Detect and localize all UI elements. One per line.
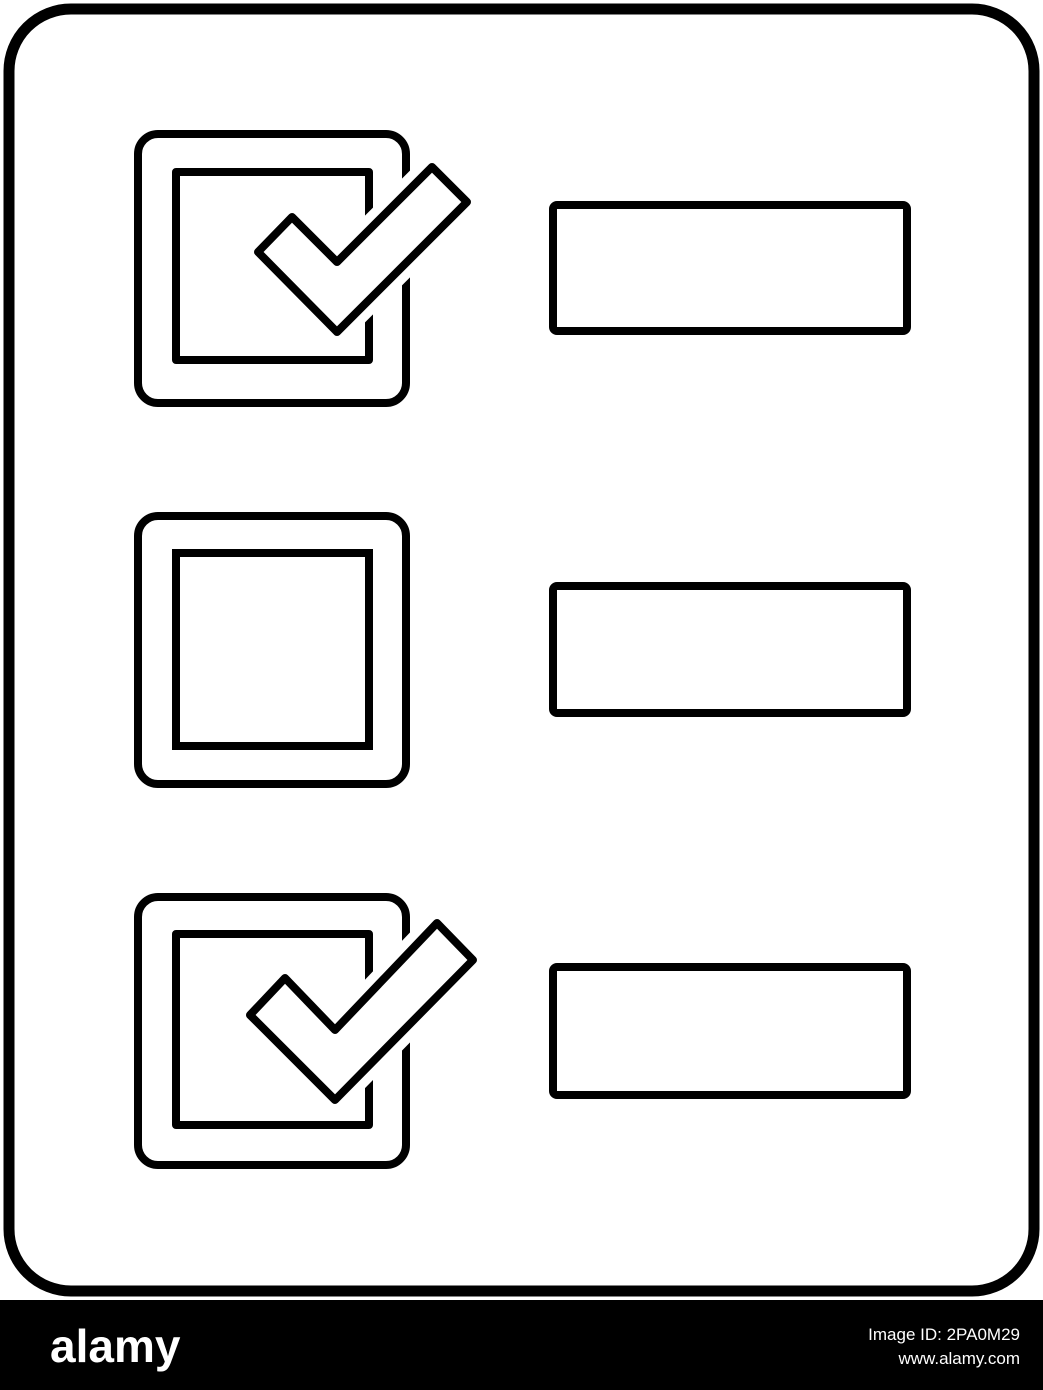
icon: checked box 1 <box>138 134 467 403</box>
bar 3 <box>553 967 907 1095</box>
image id text: Image ID: 2PA0M29 <box>868 1325 1020 1344</box>
footer bar: www.alamy.com <box>897 1349 1020 1368</box>
bar 2 <box>553 586 907 713</box>
icon: empty box 2 <box>138 516 406 784</box>
logo text: alamy <box>50 1320 181 1372</box>
footer bar <box>0 1300 1043 1390</box>
bar 1 <box>553 205 907 331</box>
icon: checked box 3 <box>138 897 473 1165</box>
